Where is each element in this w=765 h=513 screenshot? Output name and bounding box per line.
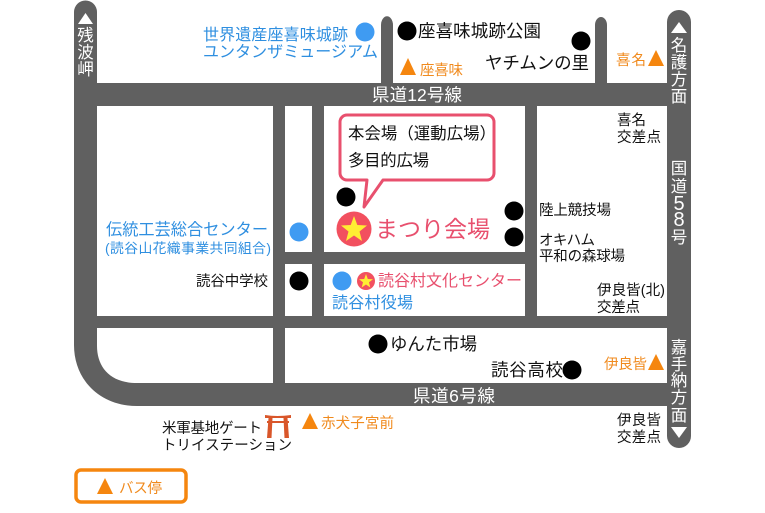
- road label: 名護方面: 護: [671, 53, 687, 72]
- landmark: 読谷高校: 読谷高校: [491, 360, 563, 380]
- bus stop: 喜名: [616, 50, 664, 69]
- label: 世界遺産座喜味城跡 ユンタンザミュージアム: 世界遺産座喜味城跡: [203, 26, 348, 44]
- road label: 国道58号: 8: [673, 209, 685, 231]
- main venue: まつり会場: まつり会場: [375, 216, 490, 242]
- label: 米軍基地ゲート トリイステーション: トリイステーション: [162, 438, 292, 454]
- road label: 残波岬: 岬: [77, 60, 94, 79]
- intersection: 伊良皆交差点: [617, 412, 661, 446]
- road label: 国道58号: 号: [671, 229, 687, 247]
- road label: 国道58号: 国: [671, 160, 687, 178]
- bus stop: 座喜味: [400, 58, 463, 79]
- landmark: ゆんた市場: ゆんた市場: [390, 334, 477, 354]
- intersection: 喜名交差点: [617, 112, 661, 146]
- blue marker: ユンタンザミュージアム: [356, 22, 374, 42]
- intersection: 喜名交差点: 交差点: [617, 129, 661, 146]
- label: オキハム平和の森球場: 平和の森球場: [539, 248, 625, 265]
- road label: 県道6号線: 県道6号線: [413, 386, 496, 406]
- road label: 嘉手納方面: [671, 338, 687, 438]
- label: 米軍基地ゲート トリイステーション: 米軍基地ゲート: [162, 420, 262, 437]
- road label: 嘉手納方面: 納: [671, 371, 687, 390]
- road label: 残波岬: 波: [77, 43, 94, 62]
- venue: 読谷村文化センター: 読谷村文化センター: [378, 272, 522, 290]
- label: 伊良皆(北)交差点: 伊良皆(北): [597, 282, 665, 299]
- label: 伝統工芸総合センター: 伝統工芸総合センター: [106, 221, 268, 239]
- label: 世界遺産座喜味城跡 ユンタンザミュージアム: ユンタンザミュージアム: [203, 43, 378, 61]
- label: 米軍基地ゲート トリイステーション: [162, 420, 292, 454]
- blue marker: 読谷村役場: [332, 272, 352, 290]
- road label: 残波岬: 残: [77, 26, 94, 45]
- landmark: ヤチムンの里: ヤチムンの里: [485, 53, 589, 73]
- label: オキハム平和の森球場: [539, 233, 625, 265]
- road label: 国道58号: 5: [673, 193, 685, 215]
- label: 伝統工芸総合センター: [105, 221, 271, 256]
- label: 世界遺産座喜味城跡 ユンタンザミュージアム: [203, 26, 378, 61]
- label: 伊良皆(北)交差点: [597, 282, 665, 316]
- main venue: まつり会場: [336, 212, 490, 246]
- road label: 嘉手納方面: 面: [671, 407, 687, 425]
- label: 読谷村役場: 読谷村役場: [332, 294, 413, 312]
- landmark: 座喜味城跡公園: 座喜味城跡公園: [418, 21, 541, 41]
- blue marker: 伝統工芸総合センター: [290, 222, 308, 242]
- bus stop: 喜名: 喜名: [616, 52, 646, 69]
- black markers: 陸上競技場 and オキハム: [504, 202, 524, 246]
- road label: 県道12号線: 県道12号線: [372, 85, 462, 105]
- label: 読谷中学校: 読谷中学校: [196, 273, 268, 290]
- road label: 嘉手納方面: 嘉: [671, 338, 687, 357]
- road label: 残波岬: [77, 13, 94, 79]
- black marker: 本会場: [336, 188, 356, 206]
- label: オキハム平和の森球場: オキハム: [539, 233, 595, 249]
- intersection: 喜名交差点: 喜名: [617, 112, 646, 129]
- label: 陸上競技場: 陸上競技場: [539, 202, 611, 219]
- legend: バス停: [76, 470, 186, 502]
- bus stop: 赤犬子宮前: [302, 413, 394, 432]
- label: 伊良皆(北)交差点: 交差点: [597, 299, 640, 316]
- intersection: 伊良皆交差点: 交差点: [617, 429, 661, 446]
- label: 伝統工芸総合センター: (読谷山花織事業共同組合): [105, 241, 271, 256]
- callout: 本会場 多目的広場: [340, 115, 496, 207]
- road label: 名護方面: 方: [671, 70, 687, 89]
- legend: バス停: バス停: [119, 480, 162, 497]
- road label: 名護方面: [671, 22, 687, 106]
- road label: 嘉手納方面: 手: [671, 355, 687, 374]
- road network: [74, 0, 691, 448]
- bus stop: 座喜味: 座喜味: [420, 62, 463, 79]
- road label: 名護方面: 面: [671, 88, 687, 106]
- black marker: 読谷中学校: [290, 272, 308, 290]
- callout: 本会場 多目的広場: 多目的広場: [348, 152, 429, 170]
- bus stop: 伊良皆: [604, 354, 664, 373]
- bus stop: 赤犬子宮前: 赤犬子宮前: [321, 415, 394, 432]
- road label: 名護方面: 名: [671, 36, 687, 55]
- bus stop: 伊良皆: 伊良皆: [604, 356, 647, 373]
- landmark: ヤチムンの里: [485, 32, 590, 73]
- road label: 国道58号: [671, 160, 687, 247]
- road label: 国道58号: 道: [671, 177, 687, 196]
- callout: 本会場 多目的広場: 本会場（運動広場）: [348, 125, 496, 143]
- road label: 嘉手納方面: 方: [671, 388, 687, 407]
- intersection: 伊良皆交差点: 伊良皆: [617, 412, 661, 429]
- icon: torii gate: [265, 415, 291, 438]
